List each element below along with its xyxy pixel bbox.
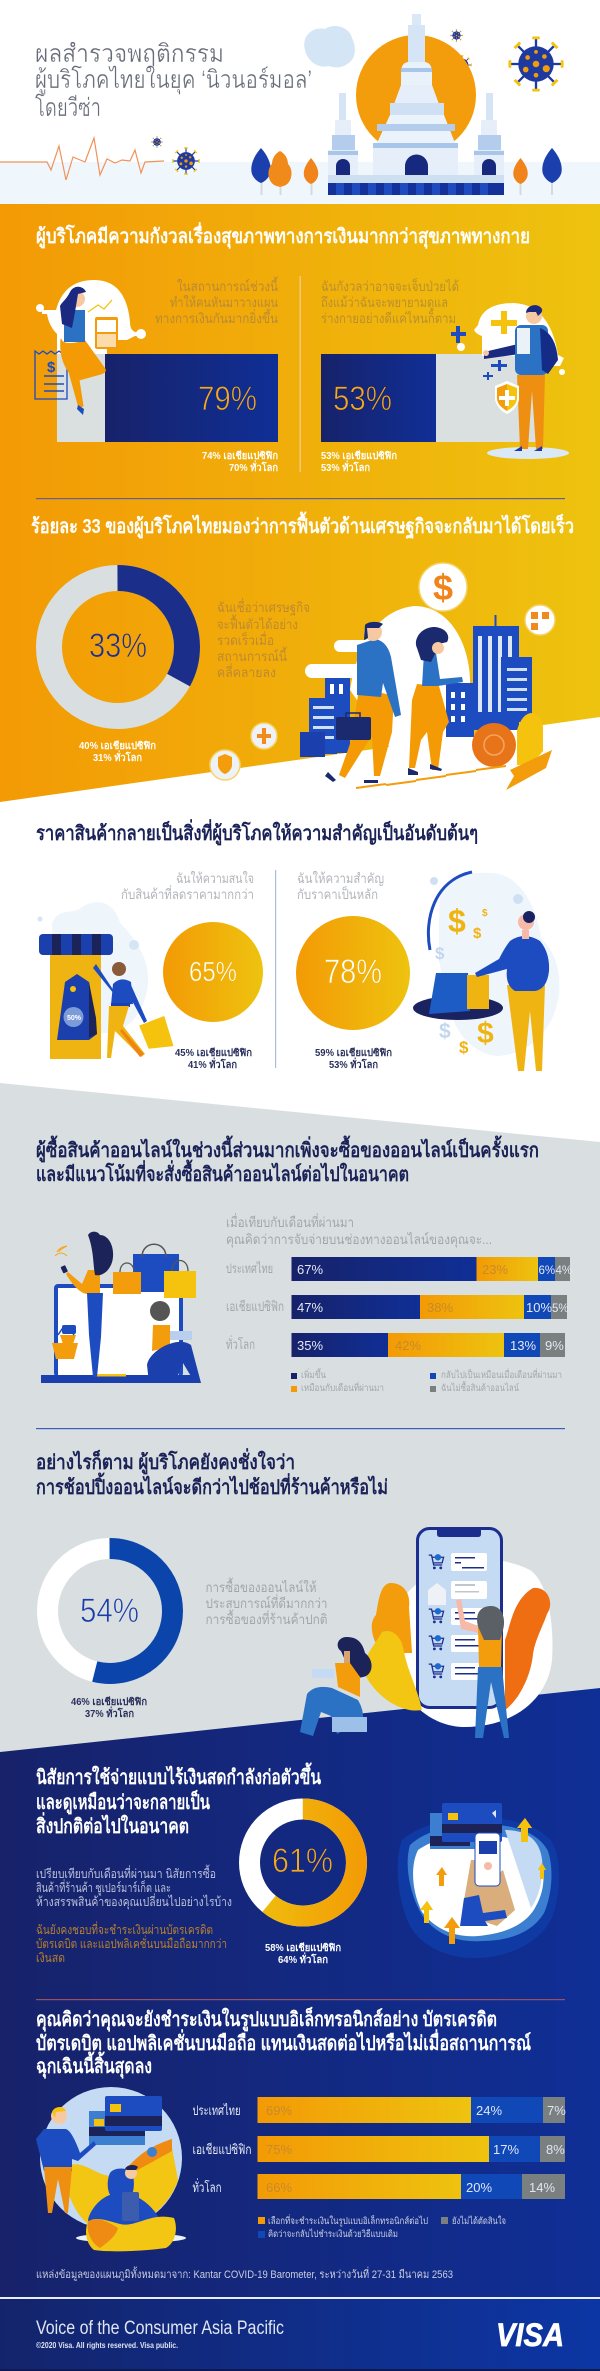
text block: comparison: สินค้าที่ร้านค้า ซูเปอร์มาร์เก็ต และ (36, 1879, 171, 1896)
heading: payment question (36, 2006, 531, 2079)
illustration: woman with bags: $ (482, 908, 488, 919)
stacked bar: Global (258, 2174, 565, 2199)
legend (258, 2214, 506, 2240)
text block: belief: สถานการณ์นี้ (217, 646, 287, 664)
text block: right statement (321, 277, 459, 326)
stacked bar: Global: 35% (297, 1338, 323, 1353)
text block: left statement: ในสถานการณ์ช่วงนี้ (177, 276, 278, 294)
stats: 41% ทั่วโลก (188, 1057, 237, 1071)
stats (175, 1047, 252, 1071)
icon: cloud (304, 26, 355, 67)
heading: online vs store: อย่างไรก็ตาม ผู้บริโภคยังคงชั่งใจว่า (36, 1447, 295, 1476)
row labels: เอเชียแปซิฟิก (226, 1299, 284, 1314)
divider horizontal (36, 1428, 565, 1429)
legend: คิดว่าจะกลับไปชำระเงินด้วยวิธีแบบเดิม (268, 2228, 398, 2240)
illustration: temple (328, 14, 504, 195)
legend (291, 1368, 562, 1394)
copyright: ©2020 Visa. All rights reserved. Visa public. (36, 2340, 178, 2350)
text block: experience: การซื้อของออนไลน์ให้ (206, 1577, 316, 1595)
heading: cashless: และดูเหมือนว่าจะกลายเป็น (36, 1789, 210, 1816)
stacked bar: Global (292, 1333, 565, 1357)
illustration: card and phone users (36, 2087, 186, 2251)
footer (0, 2297, 600, 2371)
footer title: Voice of the Consumer Asia Pacific (36, 2318, 284, 2339)
text block: right statement: ถึงแม้ว่าฉันจะพยายามดูแล (321, 295, 448, 311)
stacked bar: Thailand: 23% (482, 1262, 508, 1277)
illustration: store and shopper (38, 902, 173, 1059)
text block: question (226, 1213, 492, 1248)
stacked bar: Global: 42% (395, 1338, 421, 1353)
heading: payment question: คุณคิดว่าคุณจะยังชำระเงินในรูปแบบอิเล็กทรอนิกส์อย่าง บัตรเครดิต (36, 2006, 497, 2033)
text block: comparison: ห้างสรรพสินค้าของคุณเปลี่ยนไปอย่างไรบ้าง (36, 1893, 232, 1910)
text block: belief: ฉันเชื่อว่าเศรษฐกิจ (217, 598, 310, 616)
stats (265, 1942, 341, 1966)
text block: experience (206, 1577, 328, 1627)
stacked bar: Thailand: 67% (297, 1262, 323, 1277)
icon: virus top (450, 29, 463, 42)
heading: online shoppers: และมีแนวโน้มที่จะสั่งซื้อสินค้าออนไลน์ต่อไปในอนาคต (36, 1159, 409, 1186)
stacked bar: Global: 14% (529, 2180, 555, 2195)
circle stat: 65 percent: 65% (189, 956, 237, 987)
donut chart: 61 percent (250, 1809, 356, 1916)
icon: trees (251, 148, 562, 195)
text block: belief: คลี่คลายลง (217, 663, 276, 680)
row labels: ทั่วโลก (192, 2178, 222, 2195)
text block: right statement: ร่างกายอย่างดีแค่ไหนก็ตาม (321, 309, 456, 326)
text block: preference (36, 1921, 227, 1965)
stacked bar: Thailand: 24% (476, 2103, 502, 2118)
stats left: 74% เอเชียแปซิฟิก (202, 450, 278, 462)
stats: 45% เอเชียแปซิฟิก (175, 1047, 252, 1059)
stats (315, 1047, 392, 1071)
stacked bar: Global: 13% (510, 1338, 536, 1353)
stats: 59% เอเชียแปซิฟิก (315, 1047, 392, 1059)
stacked bar: Asia Pacific: 5% (552, 1303, 569, 1315)
title: ผู้บริโภคไทยในยุค ‘นิวนอร์มอล’ (35, 65, 312, 95)
text block: preference: ฉันยังคงชอบที่จะชำระเงินผ่านบัตรเครดิต (36, 1921, 213, 1937)
illustration: woman with bags: $ (473, 925, 482, 942)
row labels (226, 1261, 284, 1352)
icon: virus mid (453, 56, 471, 74)
donut chart: 33 percent: 33% (89, 627, 147, 665)
text block: belief (217, 598, 310, 680)
legend: กลับไปเป็นเหมือนเมื่อเดือนที่ผ่านมา (441, 1368, 562, 1381)
stats right (321, 450, 397, 474)
text block: discount (121, 870, 254, 902)
heading: cashless: นิสัยการใช้จ่ายแบบไร้เงินสดกำลังก่อตัวขึ้น (36, 1762, 321, 1789)
illustration: woman with bags: $ (435, 944, 445, 963)
illustration: man with shield (451, 303, 569, 459)
row labels: ประเทศไทย (192, 2103, 240, 2118)
legend: ยังไม่ได้ตัดสินใจ (452, 2215, 506, 2227)
text block: preference: เงินสด (36, 1951, 65, 1965)
illustration: woman with bags: $ (459, 1038, 469, 1057)
stats left: 70% ทั่วโลก (229, 460, 278, 474)
stacked bar: Asia Pacific: 10% (526, 1300, 552, 1315)
stats (79, 740, 156, 764)
stacked bar: Global: 9% (545, 1338, 564, 1353)
stacked bar: Global: 20% (466, 2180, 492, 2195)
title: ผลสำรวจพฤติกรรม (35, 40, 224, 68)
icon: virus medium (173, 148, 199, 174)
text block: left statement: ทำให้คนหันมาวางแผน (170, 294, 278, 310)
bar chart: 79 percent (57, 354, 278, 442)
stacked bar: Thailand (258, 2097, 566, 2123)
divider vertical (275, 870, 276, 1068)
illustration: phone shoppers (300, 1528, 552, 1738)
row labels: เอเชียแปซิฟิก (192, 2142, 252, 2157)
stats: 37% ทั่วโลก (85, 1706, 134, 1720)
text block: comparison (36, 1864, 232, 1910)
title: โดยวีซ่า (35, 93, 101, 122)
text block: experience: การซื้อของที่ร้านค้าปกติ (206, 1609, 328, 1627)
illustration: woman with bags: $ (439, 1020, 451, 1043)
stacked bar: Asia Pacific: 38% (427, 1300, 453, 1315)
illustration: woman with calculator (35, 280, 146, 415)
legend: ฉันไม่ซื้อสินค้าออนไลน์ (441, 1381, 519, 1394)
donut chart: 54 percent: 54% (80, 1592, 139, 1630)
stats: 46% เอเชียแปซิฟิก (71, 1696, 147, 1708)
panel: navy section (0, 1528, 600, 2371)
illustration: mobile payment (398, 1803, 559, 1958)
stacked bar: Global: 66% (266, 2180, 292, 2195)
stats: 58% เอเชียแปซิฟิก (265, 1942, 341, 1954)
stacked bar: Asia Pacific (258, 2136, 565, 2162)
stats: 53% ทั่วโลก (329, 1057, 378, 1071)
circle stat: 78 percent: 78% (324, 953, 382, 991)
stacked bar: Thailand: 7% (547, 2103, 566, 2118)
text block: belief: รวดเร็วเมื่อ (217, 631, 274, 648)
stacked bar: Thailand: 6% (538, 1265, 555, 1277)
donut chart: 33 percent (49, 578, 187, 716)
text block: left statement (155, 276, 278, 326)
row labels: ประเทศไทย (226, 1261, 273, 1276)
divider horizontal (36, 1999, 565, 2000)
stacked bar: Asia Pacific: 17% (493, 2142, 519, 2157)
donut chart: 54 percent (48, 1548, 172, 1674)
stacked bar: Thailand: 4% (556, 1265, 572, 1277)
title (35, 40, 312, 122)
heading: cashless (36, 1762, 321, 1838)
stats: 64% ทั่วโลก (278, 1952, 328, 1966)
text block: experience: ประสบการณ์ที่ดีมากกว่า (206, 1594, 328, 1611)
legend: เลือกที่จะชำระเงินในรูปแบบอิเล็กทรอนิกส์ต่อไป (268, 2214, 428, 2227)
divider vertical (300, 276, 301, 472)
illustration: laptop shoppers (41, 1232, 201, 1383)
text block: right statement: ฉันกังวลว่าอาจจะเจ็บป่วยได้ (321, 277, 459, 294)
text block: price: ฉันให้ความสำคัญ (297, 870, 384, 886)
text block: belief: จะฟื้นตัวได้อย่าง (217, 614, 298, 632)
heading: online shoppers (36, 1135, 539, 1186)
logo: VISA: VISA (496, 2317, 564, 2353)
heading: online vs store: การช้อปปิ้งออนไลน์จะดีกว่าไปช้อปที่ร้านค้าหรือไม่ (36, 1472, 388, 1499)
stats: 40% เอเชียแปซิฟิก (79, 740, 156, 752)
icon: virus small (151, 136, 163, 148)
heading: prices: ราคาสินค้ากลายเป็นสิ่งที่ผู้บริโภคให้ความสำคัญเป็นอันดับต้นๆ (36, 818, 478, 847)
source note: แหล่งข้อมูลของแผนภูมิทั้งหมดมาจาก: Kantar COVID-19 Barometer, ระหว่างวันที่ 27-31 มีนาคม 2563 (36, 2266, 453, 2281)
text block: preference: บัตรเดบิต และแอปพลิเคชั่นบนมือถือมากกว่า (36, 1935, 227, 1951)
illustration: woman with bags: $ (448, 903, 466, 939)
stacked bar: Asia Pacific: 75% (266, 2142, 292, 2157)
illustration: woman with bags: $ (477, 1017, 494, 1050)
panel: orange section (0, 204, 600, 802)
text block: price (297, 870, 384, 902)
bar chart: 53 percent: 53% (333, 380, 392, 418)
stacked bar: Asia Pacific: 47% (297, 1300, 323, 1315)
circle stat: 78 percent (296, 916, 410, 1030)
stacked bar: Thailand: 69% (266, 2103, 292, 2118)
stacked bar: Thailand (292, 1257, 572, 1281)
text block: question: คุณคิดว่าการจับจ่ายบนช่องทางออนไลน์ของคุณจะ... (226, 1231, 492, 1248)
stats (71, 1696, 147, 1720)
header background band (0, 162, 600, 204)
donut chart: 61 percent: 61% (272, 1842, 333, 1880)
stats: 31% ทั่วโลก (93, 750, 142, 764)
heartbeat line (0, 138, 164, 180)
bar chart: 79 percent: 79% (198, 380, 257, 418)
legend: เพิ่มขึ้น (301, 1368, 326, 1381)
illustration: store and shopper: 50% (67, 1015, 82, 1022)
stats right: 53% เอเชียแปซิฟิก (321, 450, 397, 462)
illustration: city and walkers: $ (433, 567, 453, 608)
icon: virus large (510, 38, 562, 90)
heading: online vs store (36, 1447, 388, 1499)
bar chart: 53 percent (321, 354, 538, 442)
illustration: woman with bags (413, 872, 559, 1071)
stacked bar: Asia Pacific: 8% (546, 2142, 565, 2157)
heading: cashless: สิ่งปกติต่อไปในอนาคต (36, 1811, 189, 1838)
stats left (202, 450, 278, 474)
icon: sun (356, 35, 476, 155)
row labels (192, 2103, 252, 2195)
text block: comparison: เปรียบเทียบกับเดือนที่ผ่านมา นิสัยการซื้อ (36, 1864, 216, 1881)
heading: payment question: ฉุกเฉินนี้สิ้นสุดลง (36, 2051, 152, 2079)
text block: discount: กับสินค้าที่ลดราคามากกว่า (121, 885, 254, 902)
circle stat: 65 percent (163, 922, 263, 1022)
panel: grey online shopping section (0, 1083, 600, 1752)
text block: discount: ฉันให้ความสนใจ (176, 870, 254, 886)
legend: เหมือนกับเดือนที่ผ่านมา (301, 1381, 384, 1394)
stacked bar: Asia Pacific (292, 1295, 569, 1319)
text block: left statement: ทางการเงินกันมากยิ่งขึ้น (155, 308, 278, 326)
divider horizontal (36, 498, 565, 499)
stats right: 53% ทั่วโลก (321, 460, 370, 474)
row labels: ทั่วโลก (226, 1335, 255, 1352)
illustration: woman with calculator: $ (47, 359, 56, 376)
text block: price: กับราคาเป็นหลัก (297, 885, 378, 902)
text block: question: เมื่อเทียบกับเดือนที่ผ่านมา (226, 1213, 354, 1230)
illustration: city and walkers (210, 563, 555, 790)
